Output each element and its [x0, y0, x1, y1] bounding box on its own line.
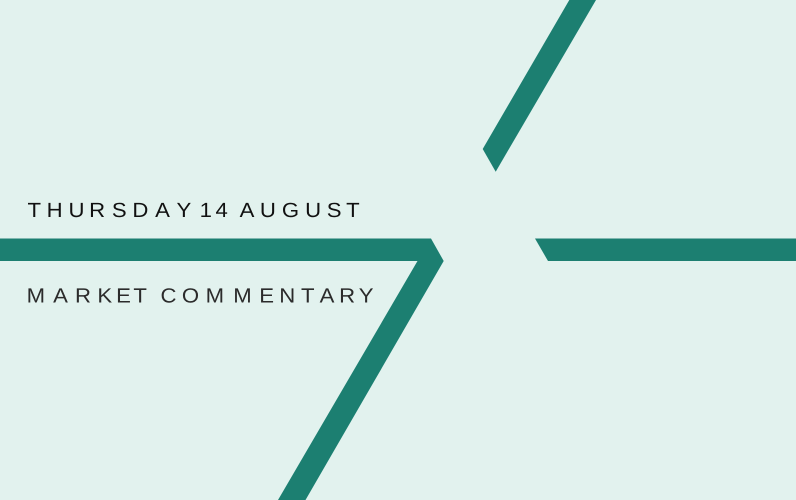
upper diagonal stripe: [483, 0, 596, 172]
subtitle: [27, 284, 374, 308]
date heading: 14: [200, 199, 228, 222]
date heading: AUGUST: [240, 199, 360, 222]
right bar: [535, 238, 796, 261]
left bar with chevron and diagonal: [0, 238, 444, 500]
subtitle: MARKET: [27, 284, 147, 308]
date heading: [28, 199, 360, 222]
subtitle: COMMENTARY: [160, 284, 374, 308]
date heading: THURSDAY: [28, 199, 192, 222]
